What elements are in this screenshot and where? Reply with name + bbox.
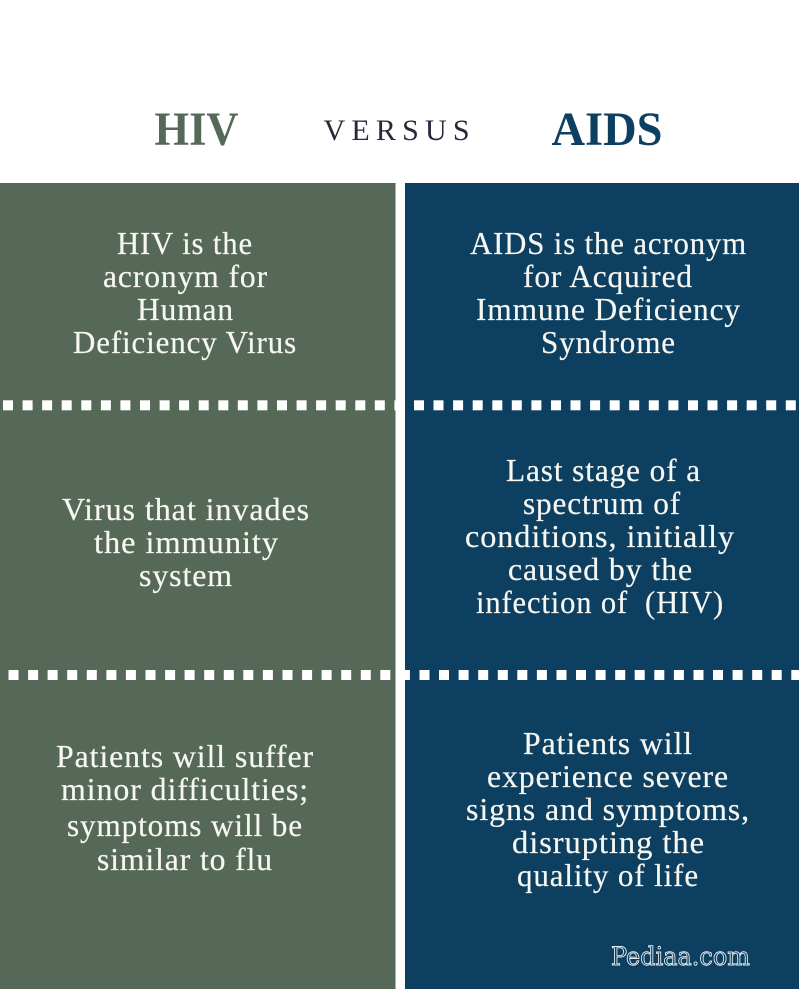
text: AIDS symptoms bbox=[466, 726, 750, 893]
heading: AIDS: AIDS bbox=[552, 103, 662, 156]
text: AIDS definition: Syndrome bbox=[541, 325, 676, 360]
text: HIV nature: system bbox=[139, 558, 233, 593]
heading: versus: VERSUS bbox=[324, 114, 470, 147]
text: HIV nature: the immunity bbox=[94, 525, 279, 560]
panel: HIV column bbox=[0, 183, 396, 989]
text: HIV nature: Virus that invades bbox=[62, 492, 310, 527]
text: HIV definition bbox=[73, 226, 297, 360]
text: AIDS nature: infection of (HIV) bbox=[476, 585, 724, 620]
text: AIDS nature: conditions, initially bbox=[465, 519, 735, 554]
text: AIDS symptoms: disrupting the bbox=[512, 825, 705, 860]
text: AIDS nature: Last stage of a bbox=[506, 453, 701, 488]
text: AIDS definition: for Acquired bbox=[523, 259, 693, 294]
divider: bottom row dotted line bbox=[8, 670, 799, 680]
text: HIV nature bbox=[62, 492, 310, 593]
text: AIDS definition bbox=[470, 226, 747, 360]
title bbox=[154, 103, 662, 156]
text: AIDS symptoms: experience severe bbox=[487, 759, 729, 794]
text: HIV definition: HIV is the bbox=[117, 226, 253, 261]
text: HIV symptoms: Patients will suffer bbox=[56, 739, 314, 774]
text: HIV symptoms bbox=[56, 739, 314, 877]
text: HIV symptoms: minor difficulties; bbox=[61, 772, 309, 807]
text: HIV definition: acronym for bbox=[103, 259, 268, 294]
text: HIV symptoms: similar to flu bbox=[97, 842, 273, 877]
text: HIV symptoms: symptoms will be bbox=[67, 808, 303, 843]
panel: AIDS column bbox=[405, 183, 799, 989]
text: AIDS nature: caused by the bbox=[508, 552, 693, 587]
text: AIDS definition: Immune Deficiency bbox=[476, 292, 741, 327]
text: AIDS nature: spectrum of bbox=[523, 486, 681, 521]
text: AIDS symptoms: Patients will bbox=[523, 726, 693, 761]
text: AIDS nature bbox=[465, 453, 735, 620]
heading: HIV: HIV bbox=[154, 103, 239, 156]
text: AIDS definition: AIDS is the acronym bbox=[470, 226, 747, 261]
logo: Pediaa.com: Pediaa.com bbox=[611, 942, 750, 971]
text: HIV definition: Human bbox=[137, 292, 234, 327]
divider: top row dotted line bbox=[3, 400, 796, 410]
text: HIV definition: Deficiency Virus bbox=[73, 325, 297, 360]
text: AIDS symptoms: quality of life bbox=[517, 858, 699, 893]
text: AIDS symptoms: signs and symptoms, bbox=[466, 792, 750, 827]
